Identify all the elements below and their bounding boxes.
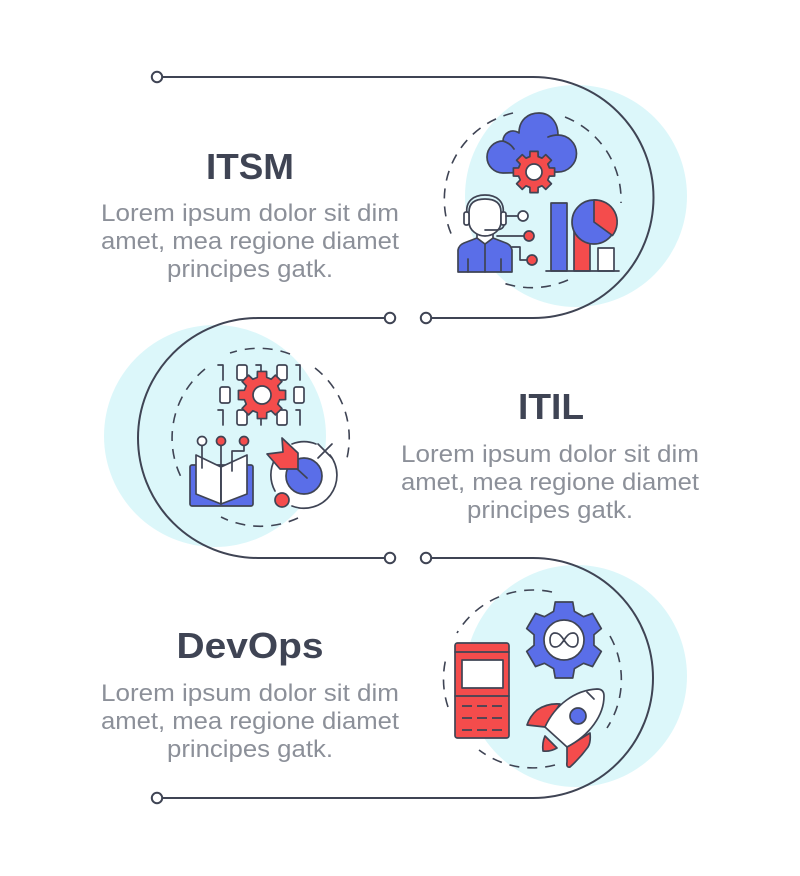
heading: ITSM: ITSM: [206, 146, 294, 187]
text block: ITIL description: Lorem ipsum dolor sit dim: [401, 441, 699, 468]
connector line: ITIL: [138, 313, 395, 563]
text block: ITSM description: Lorem ipsum dolor sit dim: [101, 200, 399, 227]
icon: binary digits and gear: [218, 365, 304, 425]
text block: DevOps description: Lorem ipsum dolor sit dim: [101, 680, 399, 707]
text block: ITIL description: [401, 441, 699, 524]
background circle: ITSM: [465, 85, 687, 307]
text block: DevOps description: [101, 680, 399, 763]
dashed ring: DevOps: [443, 590, 621, 768]
connector line: DevOps: [152, 553, 653, 803]
text block: DevOps description: amet, mea regione diamet: [101, 708, 399, 735]
icon: device with screen: [455, 643, 509, 738]
icon: support agent with headset: [458, 195, 537, 272]
background circle: DevOps: [465, 565, 687, 787]
background circle: ITIL: [104, 325, 326, 547]
icon: open book: [190, 436, 253, 506]
heading: ITIL: ITIL: [518, 386, 584, 427]
icon: rocket: [527, 689, 604, 767]
text block: ITSM description: principes gatk.: [167, 256, 333, 283]
text block: ITSM description: [101, 200, 399, 283]
icon: cloud with gear: [487, 113, 576, 193]
text block: ITIL description: principes gatk.: [467, 497, 633, 524]
icon: gear with infinity: [527, 602, 601, 678]
dashed ring: ITIL: [172, 348, 349, 526]
text block: ITSM description: amet, mea regione diamet: [101, 228, 399, 255]
text block: DevOps description: principes gatk.: [167, 736, 333, 763]
heading: DevOps: DevOps: [176, 625, 324, 666]
dashed ring: ITSM: [444, 113, 621, 288]
icon: bar and pie chart: [546, 200, 619, 271]
text block: ITIL description: amet, mea regione diamet: [401, 469, 699, 496]
icon: target with dart: [267, 438, 337, 508]
connector line: ITSM: [152, 72, 654, 323]
